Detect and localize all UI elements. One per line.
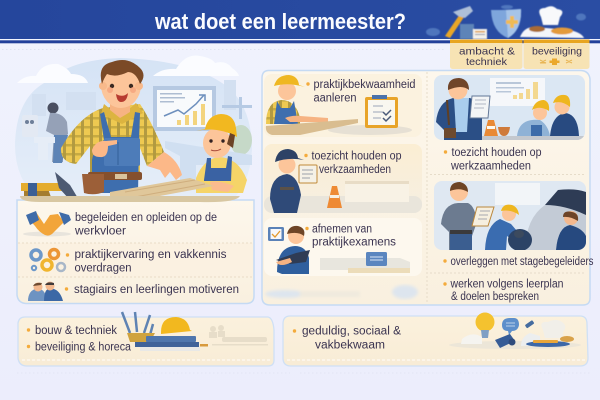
icon: shield — [491, 9, 521, 38]
clouds — [17, 56, 239, 83]
wood ledge — [20, 196, 240, 202]
wood plank — [110, 178, 214, 200]
chart board — [153, 86, 216, 131]
teacher — [61, 60, 182, 194]
text: beveiliging & horeca — [35, 342, 132, 354]
text: begeleiden: begeleiden en opleiden op de — [75, 212, 217, 224]
card: toezicht houden (middle) — [264, 144, 422, 213]
cone — [327, 186, 342, 208]
faded people icons — [209, 325, 268, 346]
text: toezicht houden: werkzaamheden — [450, 160, 531, 172]
clipboard — [299, 165, 317, 183]
tab: ambacht & techniek: techniek — [466, 56, 508, 68]
overall straps — [204, 156, 232, 181]
text: praktijkervaring: overdragen — [74, 262, 132, 274]
card: car photo — [434, 181, 586, 251]
bullet — [293, 329, 296, 333]
bullet — [66, 253, 69, 257]
card: afnemen — [264, 218, 422, 276]
checkbox icon — [268, 227, 284, 241]
clipboard — [472, 207, 494, 226]
decorative dotted lines — [17, 372, 590, 374]
row band — [18, 243, 253, 277]
ears — [99, 82, 107, 90]
cone and bowl — [484, 120, 510, 136]
icon: book and papers — [460, 24, 487, 39]
text: aanleren — [314, 92, 356, 104]
illustration: tools, books and helmet — [122, 312, 208, 351]
shirt — [61, 104, 164, 180]
right plant and table — [165, 125, 252, 185]
bullet — [304, 154, 308, 157]
hair — [101, 60, 144, 84]
radio — [495, 334, 516, 348]
background building — [32, 80, 252, 119]
hand — [210, 182, 234, 192]
trainee 2 — [550, 95, 579, 136]
text: begeleiden: werkvloer — [74, 226, 126, 238]
chef hat and plate — [521, 320, 574, 347]
panel: middle and right tasks — [262, 70, 594, 305]
background worker — [22, 102, 68, 163]
trainee 1 — [517, 100, 550, 136]
speech bubble — [502, 318, 519, 335]
icon: handshake — [23, 211, 71, 236]
worker — [266, 75, 328, 124]
apprentice — [485, 204, 519, 250]
title: wat doet een leermeester? — [154, 9, 406, 34]
icon: two trainees — [28, 282, 63, 301]
header icons: tools, shield, chef hat — [426, 5, 586, 39]
shirt — [196, 157, 247, 193]
text: vakbekwaam — [315, 340, 385, 352]
text: praktijkbekwaamheid — [314, 79, 416, 91]
text: werken volgens: & doelen bespreken — [451, 291, 539, 303]
lightbulb — [476, 312, 494, 338]
helmet — [196, 114, 237, 137]
backdrop circle — [15, 58, 252, 202]
icon: hammer — [445, 6, 473, 38]
decorative dotted line — [2, 48, 445, 50]
tab: beveiliging: beveiliging — [532, 46, 582, 58]
text: bouw & techniek — [35, 325, 117, 337]
bullet — [443, 282, 447, 286]
header banner — [0, 0, 600, 43]
tool pouch — [82, 174, 104, 194]
panel: sectors — [18, 312, 274, 366]
text: toezicht houden: toezicht houden op — [452, 147, 542, 159]
right hand — [147, 152, 182, 180]
card: praktijkbekwaamheid — [264, 74, 422, 137]
hair — [227, 133, 235, 148]
text: praktijkexamens — [312, 236, 396, 248]
bullet — [27, 328, 30, 332]
wooden board — [266, 119, 358, 135]
panel: left tasks — [17, 196, 254, 304]
icon: chef hat and food — [520, 6, 584, 38]
icon: gears — [31, 250, 65, 271]
text: toezicht houden op — [312, 150, 402, 162]
bullet — [444, 150, 447, 154]
icon: clipboard — [365, 95, 398, 128]
mentor — [441, 182, 477, 250]
examiner — [276, 226, 310, 274]
bullet — [305, 227, 309, 230]
illustration: bulb, speech and chef — [449, 312, 581, 349]
document — [470, 96, 490, 118]
worker — [270, 149, 304, 213]
pointing hand — [92, 140, 117, 157]
bullet — [306, 82, 310, 86]
collar — [101, 103, 143, 124]
bullet — [65, 287, 68, 291]
text: afnemen van — [312, 224, 372, 236]
hero illustration — [15, 56, 252, 202]
face — [110, 84, 114, 88]
panel: traits — [283, 312, 588, 366]
tabs — [450, 40, 590, 69]
faded decorations — [265, 285, 418, 299]
tab: ambacht & techniek: ambacht & — [459, 46, 515, 58]
belt — [88, 172, 142, 180]
text: praktijkervaring: praktijkervaring en vakkennis — [74, 249, 227, 261]
teacher — [436, 78, 482, 140]
child in helmet — [196, 114, 247, 193]
overalls — [92, 112, 140, 193]
head — [101, 62, 141, 108]
wood and tool foreground — [21, 172, 79, 201]
bullet — [443, 259, 447, 263]
text: verkzaamheden — [319, 164, 391, 176]
engine and crouching trainee — [508, 211, 586, 251]
card: supervising photo — [434, 75, 588, 140]
car — [526, 205, 586, 250]
tab: ambacht & techniek — [450, 40, 522, 69]
face — [203, 128, 231, 158]
decorative clouds — [426, 5, 586, 36]
neck — [110, 94, 130, 118]
text: geduldig, sociaal & — [302, 326, 401, 338]
text: stagiairs: stagiairs en leerlingen motiveren — [74, 284, 239, 296]
text: werken volgens: werken volgens leerplan — [450, 278, 564, 290]
